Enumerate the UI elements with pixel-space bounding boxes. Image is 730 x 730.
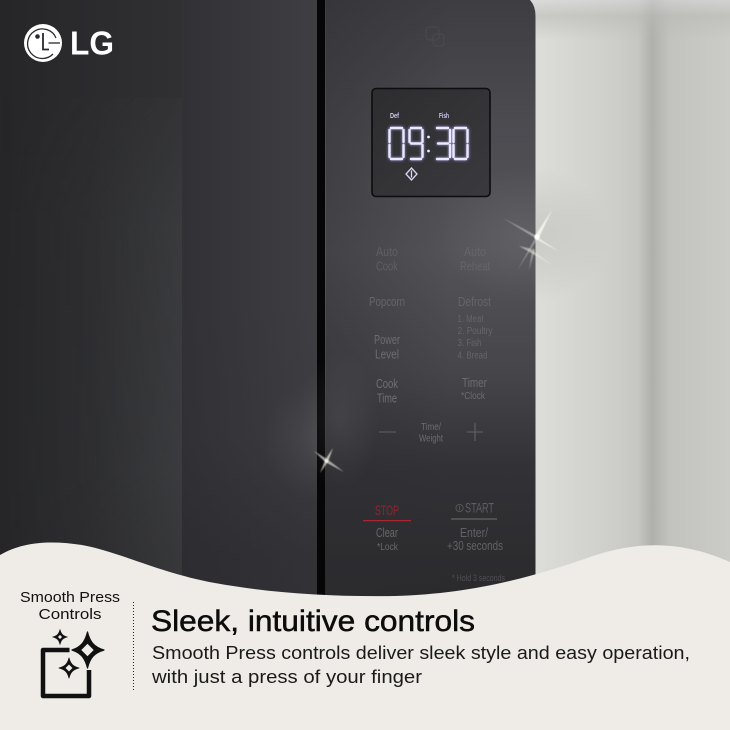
defrost list: 1. Meat bbox=[458, 314, 484, 325]
minus and plus controls bbox=[379, 423, 483, 441]
stop button: Clear bbox=[376, 525, 398, 540]
power level: Level bbox=[375, 346, 399, 362]
body text: with just a press of your finger bbox=[151, 667, 422, 687]
left door glass bbox=[0, 0, 317, 595]
cook time: Time bbox=[377, 390, 397, 406]
body text bbox=[151, 643, 690, 687]
auto reheat: Auto bbox=[464, 244, 486, 259]
feature label: Smooth Press Controls: Smooth Press bbox=[20, 589, 120, 606]
timer bbox=[461, 375, 488, 402]
cook time: Cook bbox=[376, 376, 398, 391]
auto reheat bbox=[460, 244, 490, 274]
touch control labels bbox=[369, 244, 492, 444]
sparkle: upper right bbox=[503, 210, 560, 271]
background wall bbox=[530, 0, 730, 600]
defrost list: 2. Poultry bbox=[458, 326, 492, 337]
heading: Sleek, intuitive controls bbox=[151, 605, 475, 638]
display indicators: Fish bbox=[439, 113, 449, 120]
time weight: Time/ bbox=[421, 422, 441, 433]
clock digits 09:30 bbox=[390, 128, 468, 159]
auto cook: Cook bbox=[376, 258, 398, 274]
start indicator icon bbox=[406, 168, 417, 180]
cream wave panel bbox=[0, 542, 730, 730]
timer: Timer bbox=[462, 375, 488, 390]
power level bbox=[374, 332, 400, 362]
stop button: STOP bbox=[375, 503, 399, 518]
feature label: Smooth Press Controls: Controls bbox=[38, 606, 102, 623]
start button: START bbox=[465, 500, 494, 516]
time weight bbox=[419, 422, 443, 444]
sparkle: door edge bbox=[314, 448, 344, 473]
middle sparkle bbox=[59, 658, 79, 678]
defrost list bbox=[458, 314, 492, 362]
auto reheat: Reheat bbox=[460, 258, 490, 274]
auto cook bbox=[376, 244, 398, 274]
body text: Smooth Press controls deliver sleek style and easy operation, bbox=[152, 643, 690, 663]
defrost list: 3. Fish bbox=[458, 338, 482, 349]
microwave body bbox=[0, 0, 610, 600]
display screen bbox=[372, 88, 490, 196]
timer: *Clock bbox=[461, 391, 486, 402]
icon: sparkling square bbox=[43, 630, 104, 696]
large sparkle bbox=[72, 632, 104, 668]
start button bbox=[447, 500, 505, 583]
power level: Power bbox=[374, 332, 400, 347]
faint door badge bbox=[426, 27, 444, 46]
door gap bbox=[317, 0, 326, 600]
auto cook: Auto bbox=[376, 244, 398, 259]
LG logo bbox=[24, 24, 114, 62]
square outline bbox=[43, 650, 89, 696]
time weight: Weight bbox=[419, 434, 443, 444]
cook time bbox=[376, 376, 398, 406]
control panel bbox=[300, 0, 610, 600]
display indicators: Def bbox=[390, 113, 400, 120]
start button: +30 seconds bbox=[447, 538, 503, 553]
logo wordmark: LG bbox=[70, 24, 114, 62]
stop button: *Lock bbox=[377, 542, 399, 553]
start button: Enter/ bbox=[460, 525, 488, 540]
logo circle mark bbox=[24, 24, 62, 62]
stop button bbox=[363, 503, 411, 553]
dotted divider bbox=[132, 602, 134, 692]
start button: * Hold 3 seconds bbox=[452, 573, 505, 583]
small sparkle top bbox=[52, 630, 68, 644]
feature label: Smooth Press Controls bbox=[20, 589, 120, 623]
popcorn: Popcorn bbox=[369, 294, 405, 309]
defrost list: 4. Bread bbox=[458, 350, 488, 362]
display indicators bbox=[390, 113, 449, 120]
defrost: Defrost bbox=[458, 294, 491, 309]
